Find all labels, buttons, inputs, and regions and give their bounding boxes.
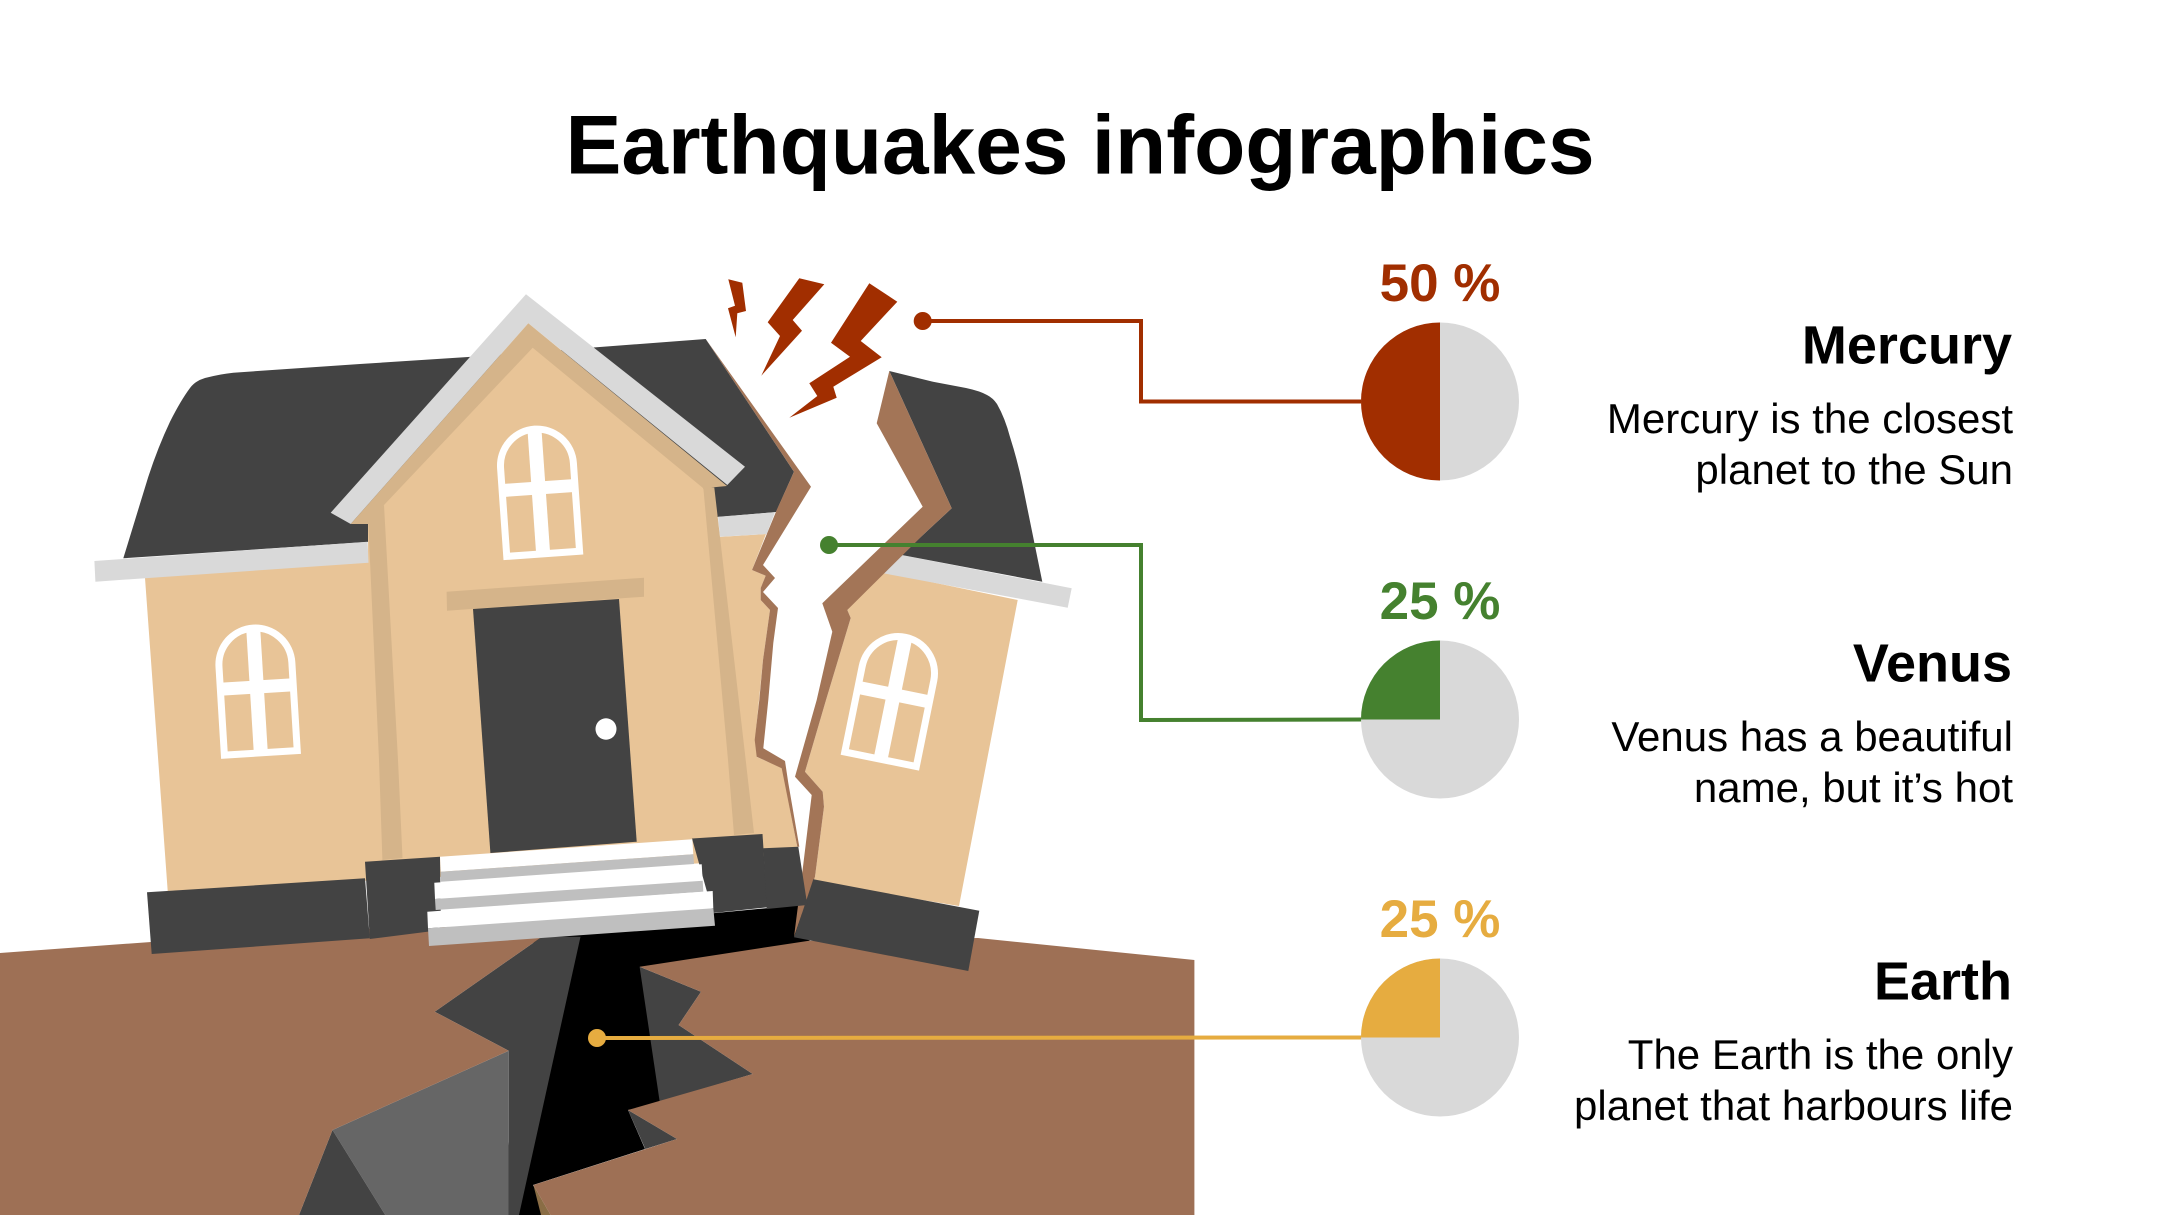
connector: Venus	[820, 536, 1365, 720]
right foundation	[794, 879, 979, 971]
right wall	[805, 572, 1018, 906]
description: Earth: The Earth is the only	[1628, 1031, 2013, 1078]
lightning bolts	[728, 278, 897, 418]
main wall	[145, 335, 797, 891]
upper arched window	[498, 427, 580, 556]
right pilaster	[703, 488, 754, 835]
right cornice	[883, 555, 1072, 608]
row: Earth	[1361, 890, 2013, 1129]
heading: Venus: Venus	[1853, 634, 2012, 694]
connector: Earth	[588, 1029, 1365, 1047]
description: Venus: Venus has a beautiful	[1611, 713, 2013, 760]
connector: Mercury	[914, 312, 1365, 402]
row: Venus	[1361, 572, 2013, 811]
right stair wall	[692, 834, 767, 913]
description: Mercury: Mercury is the closest	[1607, 395, 2013, 442]
door	[473, 599, 637, 853]
illustration: cracked house on split ground	[0, 278, 1194, 1215]
pie: Earth	[1361, 958, 1519, 1116]
right window	[844, 630, 942, 767]
pie: Mercury	[1361, 322, 1519, 480]
left crack edge	[706, 339, 811, 847]
percent: Mercury: 50 %	[1380, 254, 1500, 313]
description: Venus: name, but it’s hot	[1694, 764, 2013, 811]
percent: Earth: 25 %	[1380, 890, 1500, 949]
heading: Earth: Earth	[1874, 952, 2012, 1012]
left house section	[94, 294, 811, 954]
ground left slab	[0, 925, 542, 1215]
left stair wall	[365, 857, 441, 939]
front steps	[427, 839, 715, 946]
left cornice	[94, 542, 369, 582]
right house section	[794, 371, 1072, 971]
gable tan trim	[351, 323, 727, 524]
right-of-gable cornice	[718, 512, 775, 537]
door knob	[596, 718, 616, 740]
title: Earthquakes infographics	[565, 98, 1595, 192]
left roof	[123, 339, 794, 558]
left arched window	[216, 626, 298, 755]
heading: Mercury: Mercury	[1802, 316, 2012, 376]
ground right slab	[533, 938, 1194, 1215]
right roof	[889, 371, 1042, 582]
description: Earth: planet that harbours life	[1574, 1082, 2013, 1129]
description: Mercury: planet to the Sun	[1695, 446, 2013, 493]
right crack edge	[794, 371, 952, 937]
left pilaster	[368, 505, 402, 860]
gable grey trim	[331, 294, 745, 524]
row: Mercury	[1361, 254, 2013, 493]
far-right foundation	[763, 847, 807, 909]
ground crack interior	[299, 905, 810, 1215]
percent: Venus: 25 %	[1380, 572, 1500, 631]
door lintel	[447, 578, 644, 611]
pie: Venus	[1361, 640, 1519, 798]
left foundation	[147, 878, 370, 954]
